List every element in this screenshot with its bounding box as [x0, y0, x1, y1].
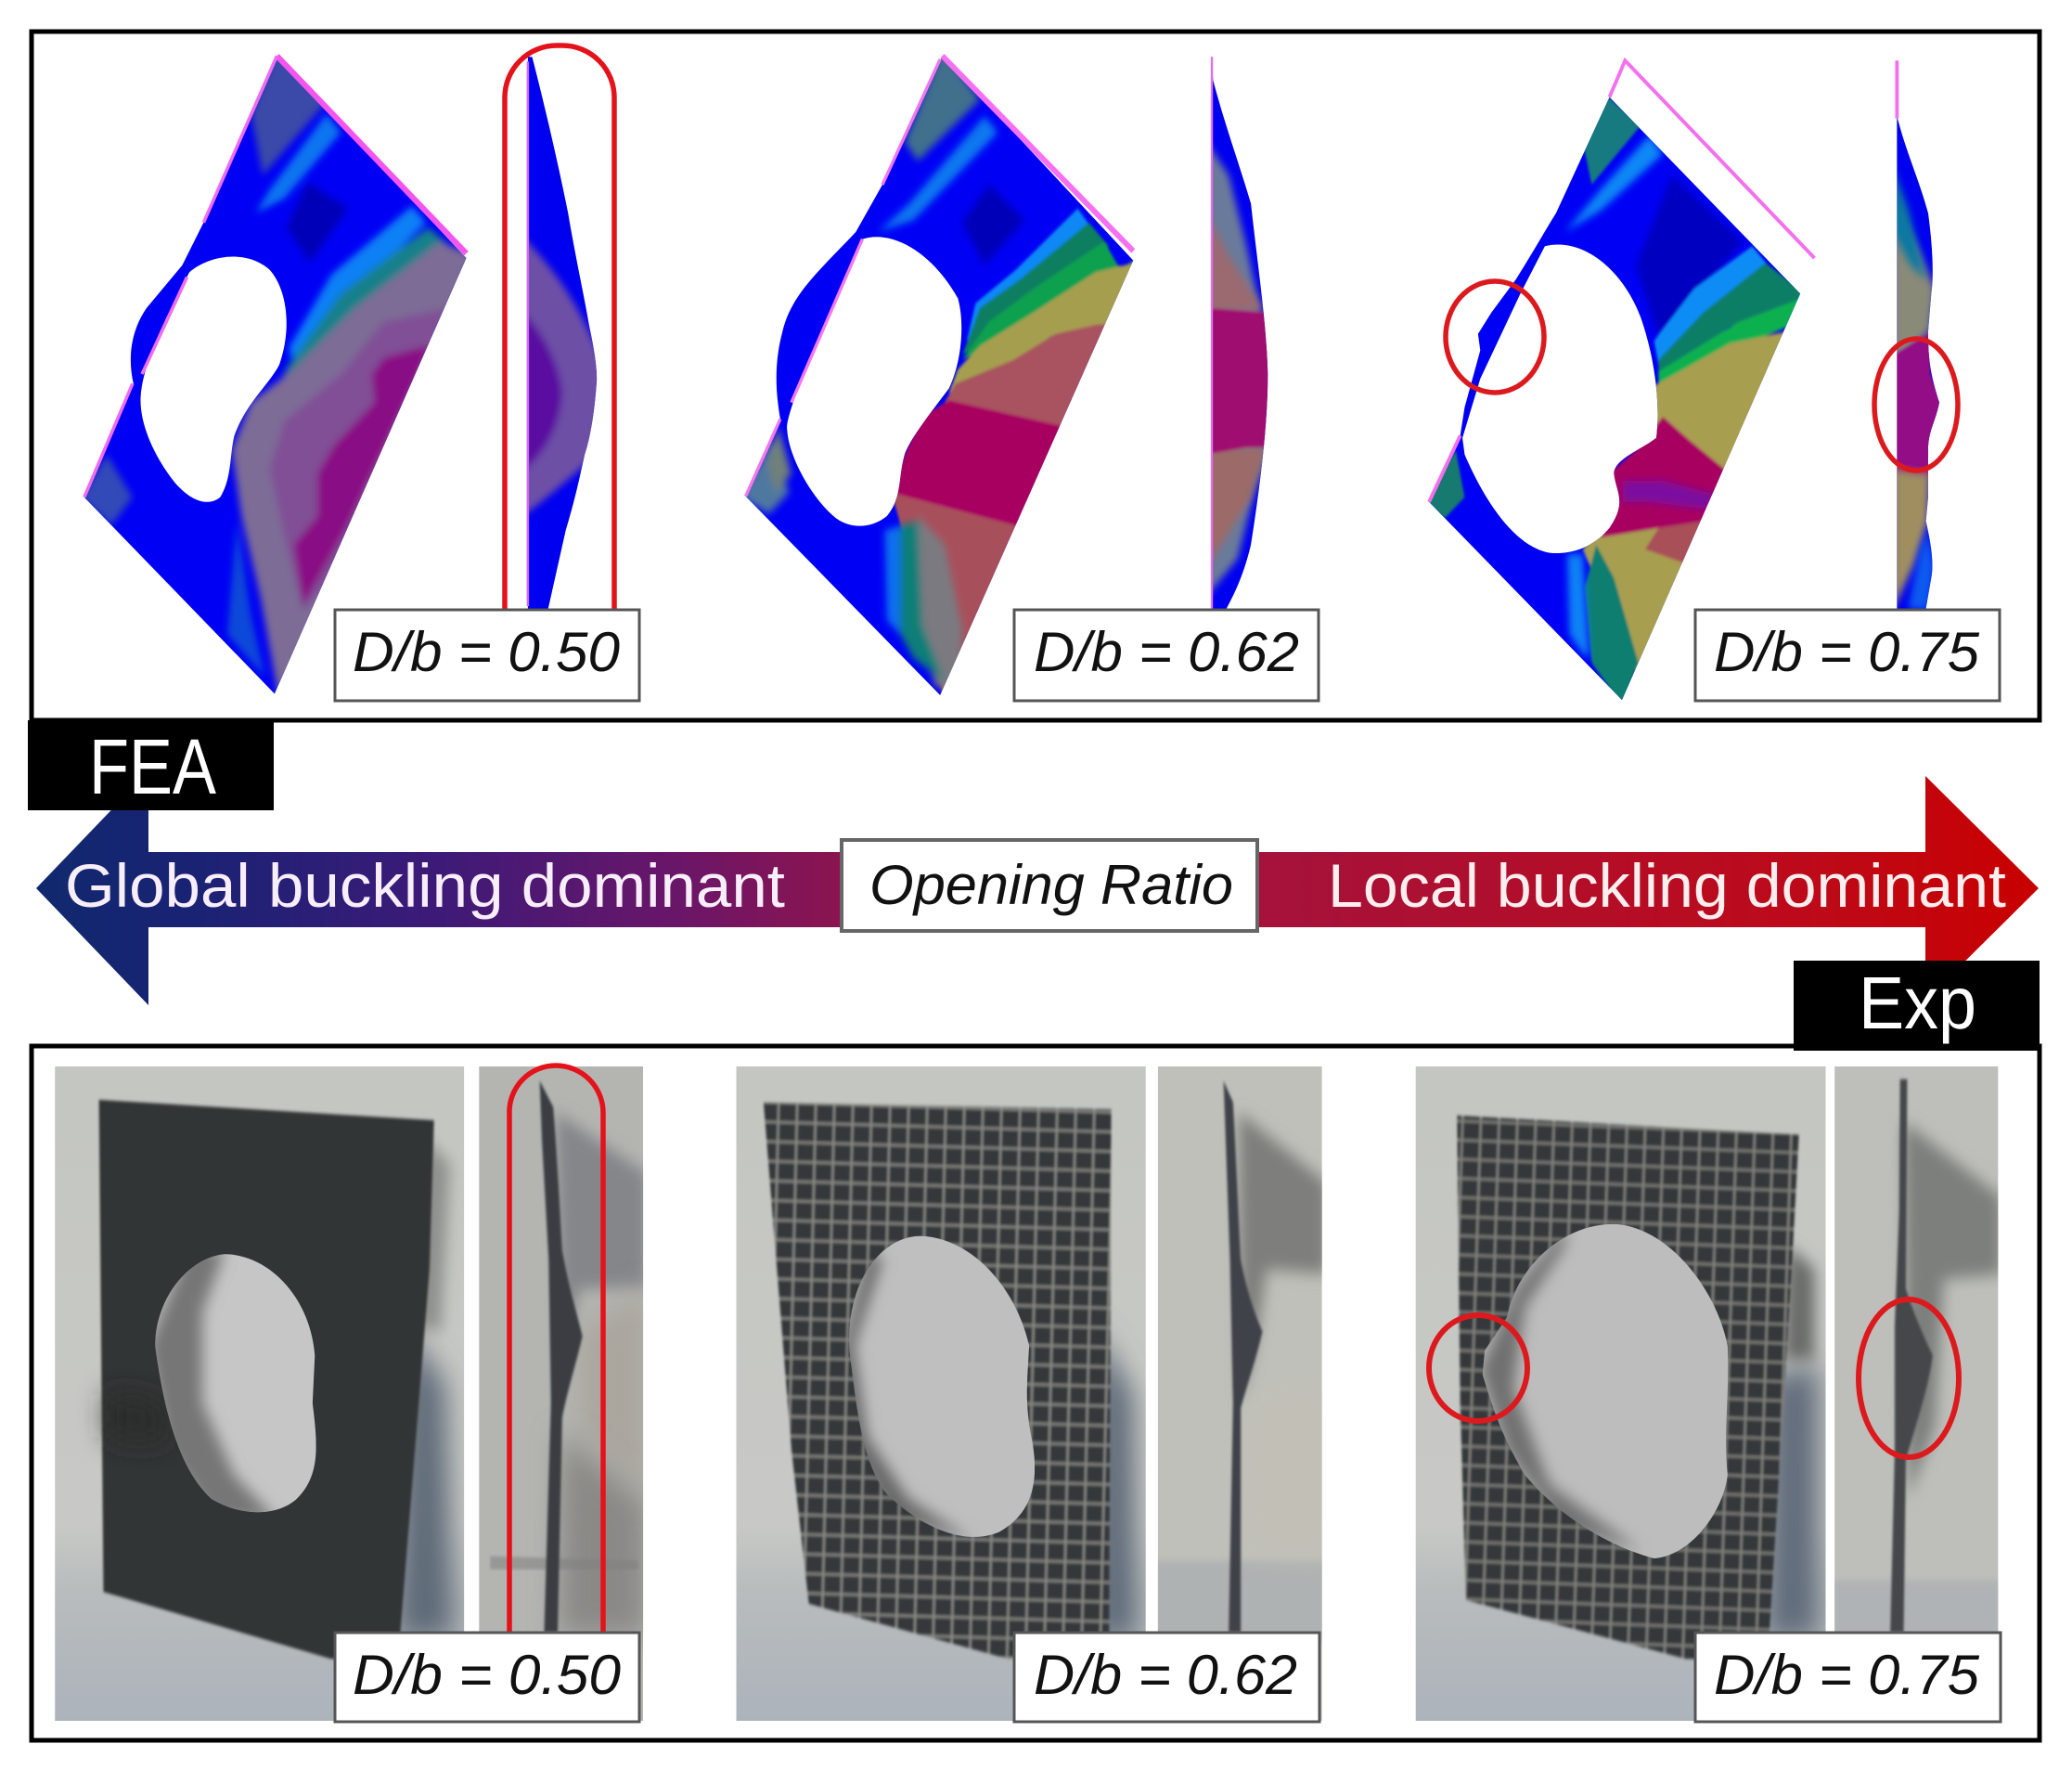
label D/b 0.62 — [1014, 610, 1319, 701]
red rounded frame around side view — [505, 45, 614, 609]
FEA plate D/b 0.62 — [744, 54, 1136, 695]
red rounded frame around side photo — [509, 1066, 603, 1632]
photo: side view D/b 0.62 — [1154, 1066, 1327, 1721]
FEA side view D/b 0.62 — [1210, 56, 1268, 609]
label D/b 0.75: D/b = 0.75 — [1714, 1644, 1980, 1706]
photo: plate D/b 0.50 — [55, 1066, 464, 1721]
label D/b 0.50: D/b = 0.50 — [353, 621, 620, 683]
label D/b 0.50: D/b = 0.50 — [353, 1644, 621, 1706]
arrow: global buckling dominant — [36, 771, 841, 1005]
red circle on plate photo — [1429, 1315, 1527, 1421]
magenta edge lines — [277, 56, 467, 253]
arrow: global buckling dominant: Global buckling dominant — [65, 851, 785, 920]
arrow: local buckling dominant — [1257, 776, 2039, 1001]
label D/b 0.50 — [335, 610, 639, 701]
red circle on plate — [1446, 281, 1544, 393]
label D/b 0.75 — [1695, 1633, 2001, 1722]
magenta edge lines — [943, 56, 1133, 251]
opening ratio label — [842, 840, 1257, 931]
label D/b 0.62 — [1014, 1633, 1319, 1722]
FEA plate D/b 0.75 — [1418, 60, 1814, 710]
panel: experimental results — [32, 1046, 2040, 1740]
FEA side view D/b 0.75 — [1893, 60, 1941, 611]
photo: plate D/b 0.62 — [737, 1066, 1146, 1721]
Exp tag: Exp — [1859, 962, 1976, 1044]
arrow: local buckling dominant: Local buckling dominant — [1328, 851, 2006, 920]
FEA plate D/b 0.50 — [83, 54, 469, 694]
label D/b 0.75: D/b = 0.75 — [1714, 621, 1980, 683]
FEA tag: FEA — [89, 723, 216, 810]
label D/b 0.62: D/b = 0.62 — [1034, 1644, 1297, 1706]
FEA tag — [28, 720, 274, 810]
panel: FEA results — [32, 24, 2040, 720]
magenta edge lines — [1429, 60, 1814, 502]
red ellipse on side photo — [1859, 1299, 1959, 1457]
label D/b 0.75 — [1695, 610, 2000, 701]
FEA side view D/b 0.50 — [527, 57, 598, 609]
Exp tag — [1794, 961, 2040, 1051]
photo: side view D/b 0.50 — [479, 1066, 648, 1721]
opening ratio label: Opening Ratio — [869, 854, 1233, 916]
label D/b 0.50 — [335, 1633, 639, 1722]
red ellipse on side view — [1874, 339, 1958, 471]
label D/b 0.62: D/b = 0.62 — [1034, 621, 1299, 683]
photo: side view D/b 0.75 — [1834, 1066, 1999, 1632]
photo: plate D/b 0.75 — [1416, 1066, 1826, 1721]
